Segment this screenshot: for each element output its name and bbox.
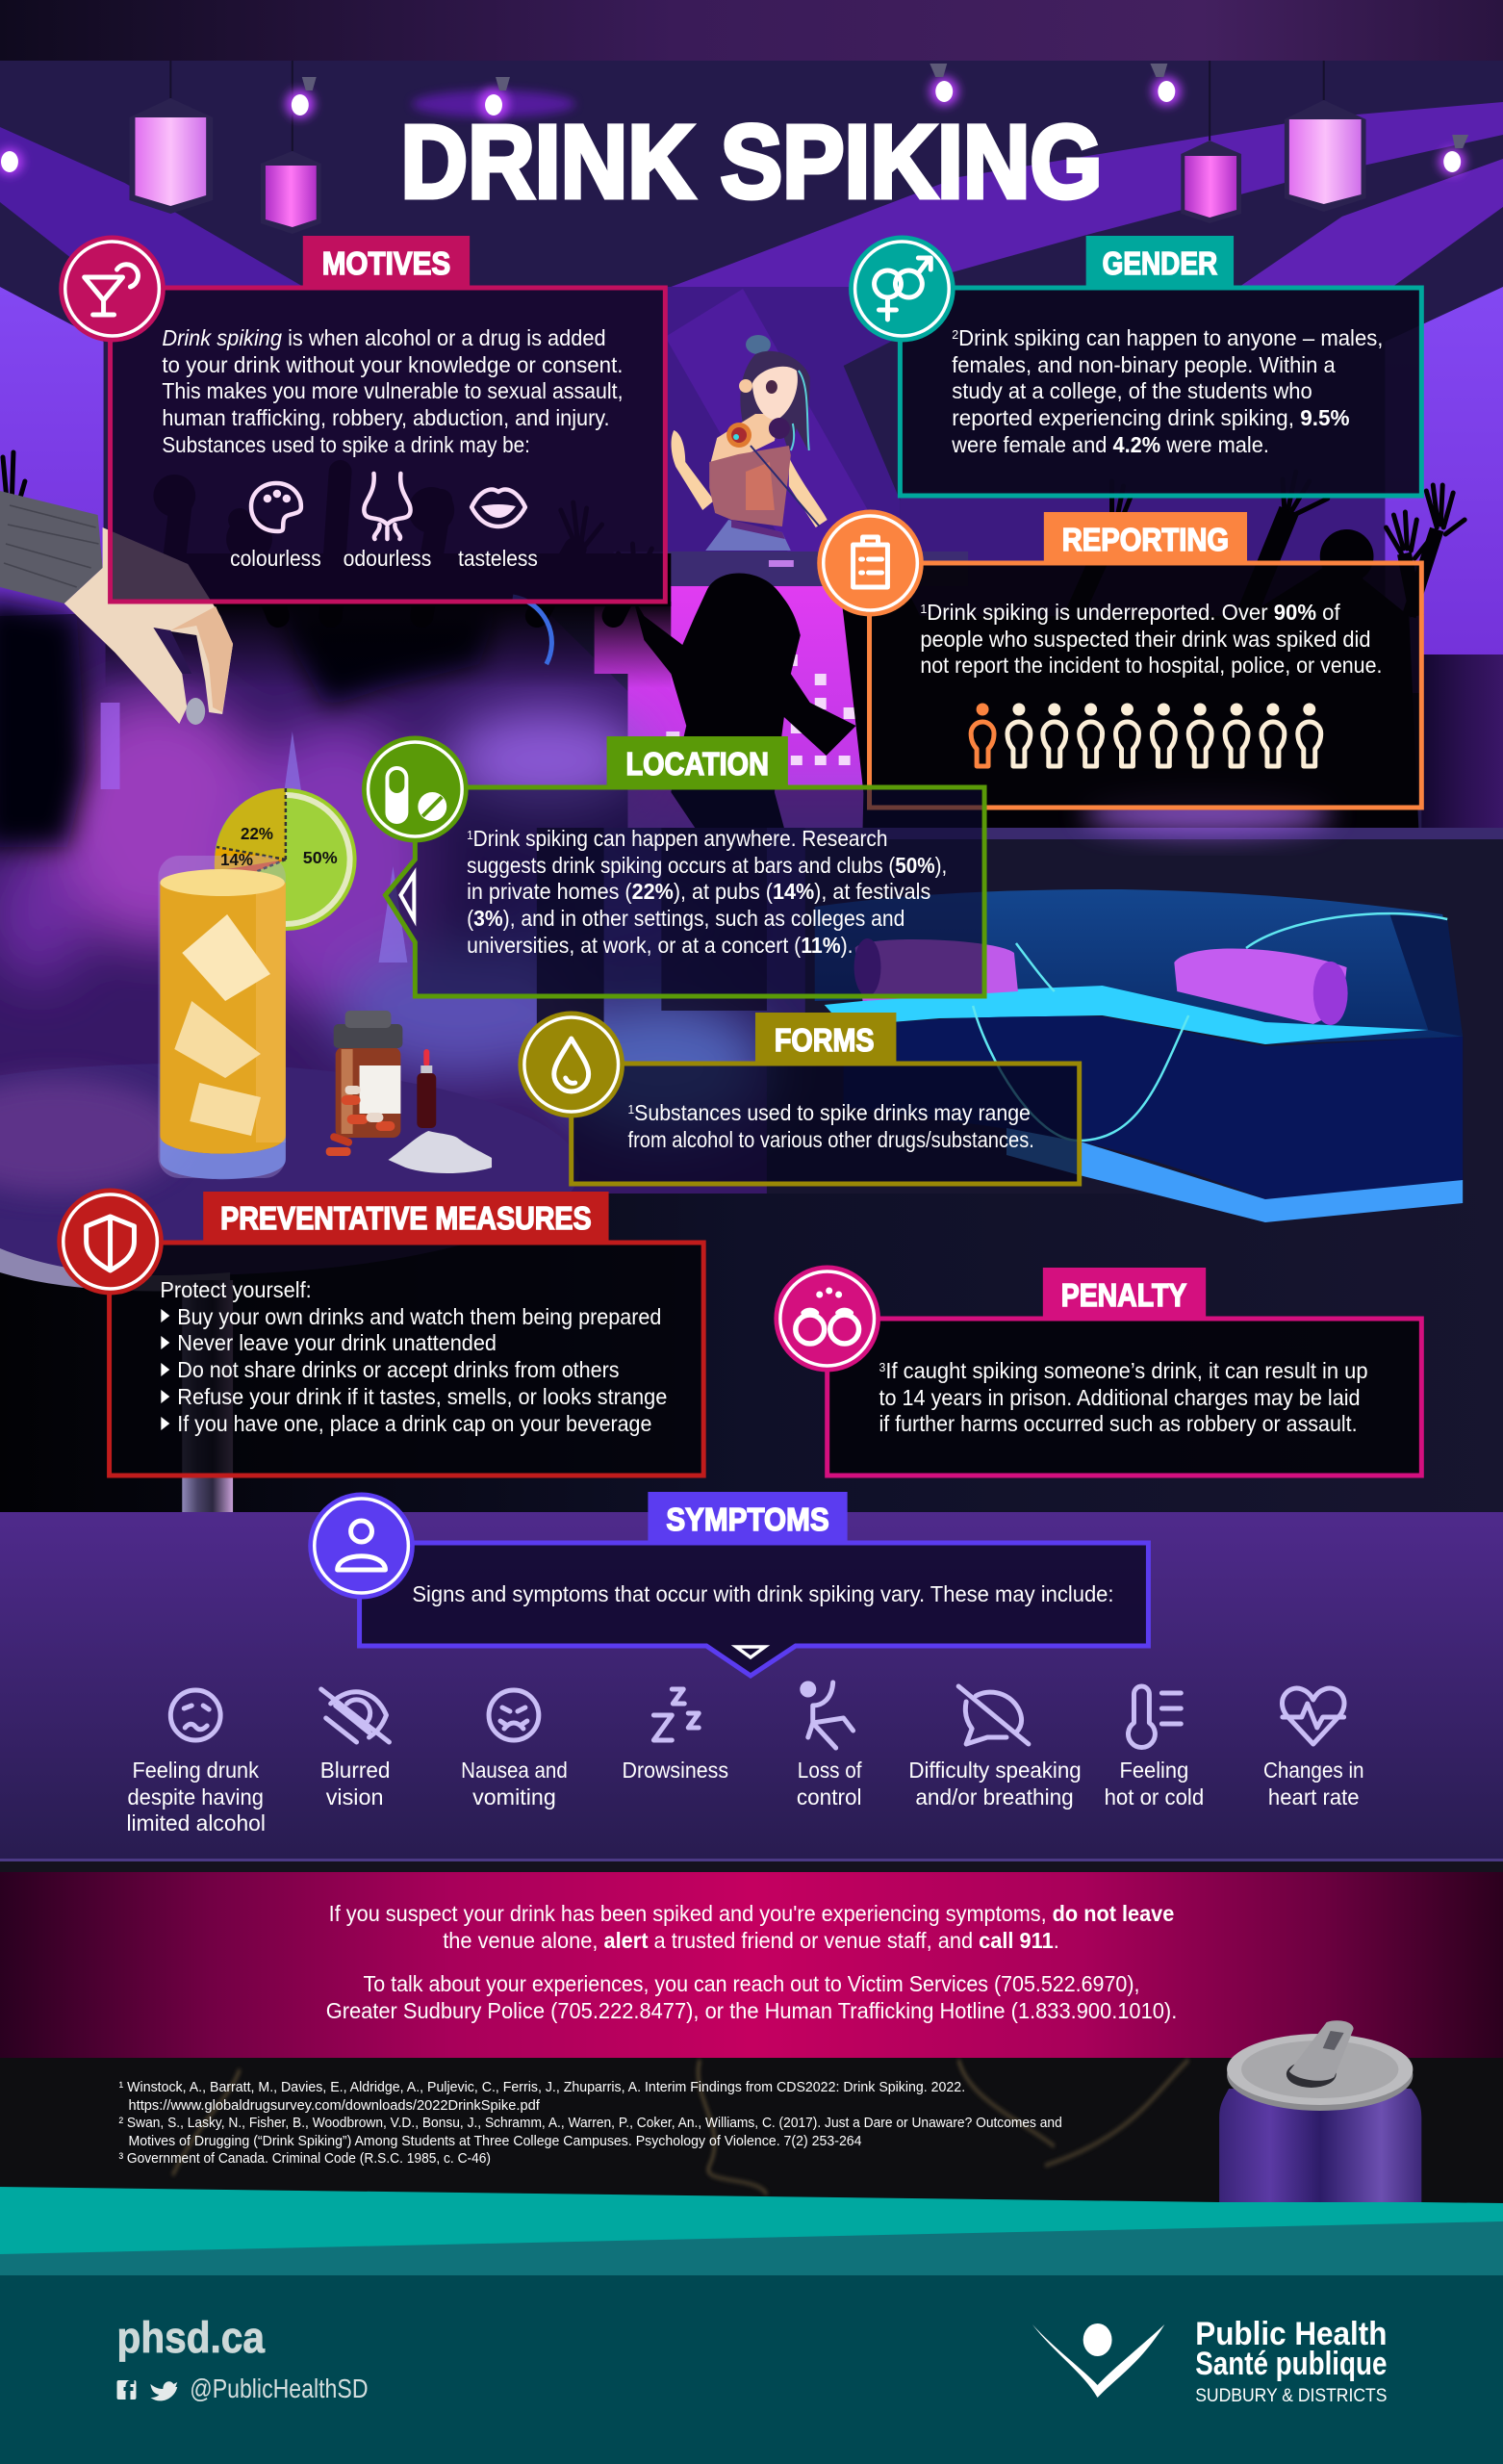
illustration: drink can bbox=[1219, 2020, 1421, 2214]
icon: person bbox=[308, 1492, 415, 1600]
symptom: drowsiness: Drowsiness bbox=[623, 1758, 728, 1783]
text: gender description: females, and non-binary people. Within a bbox=[952, 352, 1336, 377]
footer: social media: @PublicHealthSD bbox=[190, 2374, 369, 2403]
text: references bbox=[119, 2079, 1062, 2167]
symptom: changes in heart rate bbox=[1263, 1688, 1364, 1810]
band: references on black marble bbox=[0, 2058, 1503, 2212]
text: reporting description: not report the incident to hospital, police, or venue. bbox=[920, 653, 1382, 678]
text: protective tips list bbox=[160, 1277, 667, 1436]
footer: organization logo: Public Health bbox=[1195, 2316, 1387, 2352]
text: motives description: Substances used to spike a drink may be: bbox=[162, 432, 530, 457]
symptom: drowsiness bbox=[623, 1689, 728, 1783]
heading: location: LOCATION bbox=[625, 746, 769, 782]
panel: gender bbox=[849, 235, 1421, 496]
text: motives description: This makes you more vulnerable to sexual assault, bbox=[162, 378, 624, 403]
symptom: loss of control: control bbox=[797, 1784, 862, 1810]
drink spiking title: DRINK SPIKING bbox=[400, 103, 1103, 219]
band: alert message: the venue alone, alert a trusted friend or venue staff, and call 911. bbox=[443, 1928, 1059, 1953]
text: motives description: Drink spiking is when alcohol or a drug is added bbox=[162, 325, 606, 350]
section: symptoms background bbox=[0, 1512, 1503, 1860]
text: forms description: from alcohol to various other drugs/substances. bbox=[627, 1127, 1034, 1152]
symptom: blurred vision: Blurred bbox=[320, 1758, 390, 1783]
icon: gender symbols bbox=[849, 235, 955, 343]
footer: organization logo: SUDBURY & DISTRICTS bbox=[1195, 2386, 1387, 2406]
text: gender description: were female and 4.2% were male. bbox=[951, 432, 1269, 457]
nightclub background scene bbox=[0, 0, 1503, 1512]
text: gender description: study at a college, of the students who bbox=[952, 378, 1312, 403]
symptom: nausea and vomiting: vomiting bbox=[472, 1784, 556, 1810]
symptom: nausea and vomiting bbox=[461, 1690, 568, 1810]
illustration: drink glass with lime pie chart: 22% bbox=[241, 824, 273, 843]
symptom: blurred vision bbox=[320, 1689, 390, 1810]
footer bands bbox=[0, 2187, 1503, 2464]
heading: forms: FORMS bbox=[775, 1022, 875, 1058]
text: location description: in private homes (22%), at pubs (14%), at festivals bbox=[467, 879, 930, 904]
text: gender description: 2 bbox=[952, 327, 958, 342]
crowd silhouettes bbox=[3, 452, 1503, 1040]
symptom: feeling hot or cold bbox=[1105, 1686, 1204, 1810]
panel: penalty bbox=[774, 1265, 1421, 1476]
icon: nose bbox=[364, 474, 411, 539]
symptom: changes in heart rate: heart rate bbox=[1268, 1784, 1360, 1810]
text: symptoms intro: Signs and symptoms that occur with drink spiking vary. These may include: bbox=[412, 1581, 1114, 1606]
text: reporting description: people who suspected their drink was spiked did bbox=[920, 627, 1371, 652]
footer: social media bbox=[117, 2374, 369, 2403]
symptom: loss of control bbox=[797, 1682, 862, 1810]
text: location description: suggests drink spiking occurs at bars and clubs (50%), bbox=[467, 853, 947, 878]
text: forms description: 1 bbox=[627, 1102, 634, 1116]
text: protective tips list: Buy your own drinks and watch them being prepared bbox=[177, 1304, 661, 1329]
text: penalty description: if further harms occurred such as robbery or assault. bbox=[879, 1411, 1358, 1436]
symptom: changes in heart rate: Changes in bbox=[1263, 1758, 1364, 1783]
text: protective tips list: Refuse your drink if it tastes, smells, or looks strange bbox=[177, 1384, 667, 1409]
dropper bottle bbox=[417, 1049, 436, 1128]
illustration: hand dropping pill bbox=[0, 491, 233, 725]
icon: lips bbox=[471, 490, 525, 526]
symptom: nausea and vomiting: Nausea and bbox=[461, 1758, 568, 1783]
symptom: difficulty speaking and breathing: Difficulty speaking bbox=[908, 1758, 1082, 1783]
panel: motives bbox=[59, 235, 665, 602]
text: forms description: Substances used to spike drinks may range bbox=[634, 1100, 1031, 1125]
symptom: feeling drunk bbox=[126, 1690, 266, 1835]
text: motives description bbox=[162, 325, 624, 457]
icon: liquid drop bbox=[518, 1011, 624, 1118]
panel: preventative measures bbox=[57, 1188, 703, 1476]
heading: penalty: PENALTY bbox=[1061, 1277, 1186, 1313]
chart: 1 in 10 people icons bbox=[971, 703, 1321, 766]
symptom: loss of control: Loss of bbox=[798, 1758, 862, 1783]
symptom: difficulty speaking and breathing bbox=[908, 1686, 1082, 1810]
band: alert message: To talk about your experiences, you can reach out to Victim Services (705.522.6970), bbox=[364, 1971, 1139, 1996]
icon: clipboard bbox=[817, 510, 924, 616]
panel: location bbox=[362, 735, 984, 996]
text: penalty description: to 14 years in prison. Additional charges may be laid bbox=[879, 1385, 1361, 1410]
icon: palette bbox=[251, 483, 301, 531]
text: protective tips list: Never leave your drink unattended bbox=[177, 1330, 497, 1355]
text: motives description: to your drink without your knowledge or consent. bbox=[162, 352, 624, 377]
icon: cocktail glass bbox=[59, 235, 166, 343]
illustration: DJ girl bbox=[672, 335, 828, 551]
text: reporting description: 1 bbox=[920, 602, 927, 616]
illustration: drink glass with lime pie chart bbox=[158, 788, 357, 1179]
panel: symptoms bbox=[308, 1492, 1148, 1676]
text: references: ¹ Winstock, A., Barratt, M., Davies, E., Aldridge, A., Puljevic, C., Ferris, J., Zhuparris, A. Interim Findings from CDS2022: Drink Spiking. 2022. bbox=[119, 2079, 965, 2095]
text: forms description bbox=[627, 1100, 1034, 1152]
text: location description: universities, at work, or at a concert (11%). bbox=[467, 933, 853, 958]
powder pile bbox=[388, 1131, 492, 1173]
pill bottle bbox=[334, 1011, 402, 1138]
text: location description: 1 bbox=[467, 828, 473, 842]
illustration: drink glass with lime pie chart: 50% bbox=[303, 848, 338, 867]
text: reporting description bbox=[920, 600, 1382, 678]
heading: symptoms: SYMPTOMS bbox=[666, 1502, 829, 1537]
text: gender description: reported experiencing drink spiking, 9.5% bbox=[952, 405, 1350, 430]
band: alert message bbox=[0, 1859, 1503, 2058]
text: location description: (3%), and in other settings, such as colleges and bbox=[467, 906, 904, 931]
table pole bbox=[182, 1280, 233, 1512]
heading: preventative measures: PREVENTATIVE MEASURES bbox=[220, 1200, 592, 1236]
text: references: ³ Government of Canada. Criminal Code (R.S.C. 1985, c. C-46) bbox=[119, 2150, 491, 2167]
labels: substance properties: tasteless bbox=[458, 546, 538, 571]
illustration: table with pills and powder bbox=[0, 1011, 580, 1291]
text: references: Motives of Drugging (“Drink Spiking”) Among Students at Three College Campuses. Psychology of Violence. 7(2) 253-264 bbox=[128, 2133, 862, 2149]
text: references: ² Swan, S., Lasky, N., Fisher, B., Woodbrown, V.D., Bonsu, J., Schramm, A., Warren, P., Coker, An., Williams, C. (2017). Just a Dare or Unaware? Outcomes and bbox=[119, 2115, 1062, 2131]
symptom: feeling hot or cold: hot or cold bbox=[1105, 1784, 1204, 1810]
icon: handcuffs bbox=[774, 1265, 880, 1373]
text: reporting description: Drink spiking is underreported. Over bbox=[927, 600, 1274, 625]
text: protective tips list: Protect yourself: bbox=[160, 1277, 312, 1302]
symptom: feeling drunk: limited alcohol bbox=[126, 1810, 266, 1835]
text: location description bbox=[467, 826, 947, 958]
heading: gender: GENDER bbox=[1103, 245, 1217, 281]
text: protective tips list: Do not share drinks or accept drinks from others bbox=[177, 1357, 620, 1382]
illustration: blue sofa bbox=[815, 889, 1463, 1222]
symptom: feeling drunk: Feeling drunk bbox=[132, 1758, 259, 1783]
symptom: feeling drunk: despite having bbox=[127, 1784, 264, 1810]
symptom: feeling hot or cold: Feeling bbox=[1120, 1758, 1188, 1783]
labels: substance properties: odourless bbox=[344, 546, 431, 571]
text: penalty description bbox=[879, 1358, 1368, 1436]
text: penalty description: If caught spiking someone’s drink, it can result in up bbox=[885, 1358, 1368, 1383]
panel: reporting bbox=[817, 510, 1421, 808]
text: reporting description: 90% of bbox=[1274, 600, 1340, 625]
panel: forms bbox=[518, 1011, 1080, 1184]
band: alert message: If you suspect your drink has been spiked and you're experiencing symptoms, do not leave bbox=[329, 1901, 1174, 1926]
icon: shield bbox=[57, 1188, 164, 1296]
hanging lamps and bulbs bbox=[0, 61, 1468, 234]
text: references: https://www.globaldrugsurvey.com/downloads/2022DrinkSpike.pdf bbox=[128, 2097, 541, 2114]
text: gender description: Drink spiking can happen to anyone – males, bbox=[958, 325, 1383, 350]
text: protective tips list: If you have one, place a drink cap on your beverage bbox=[177, 1411, 651, 1436]
footer: organization logo bbox=[1032, 2316, 1387, 2406]
text: motives description: human trafficking, robbery, abduction, and injury. bbox=[162, 405, 610, 430]
text: penalty description: 3 bbox=[879, 1360, 885, 1374]
heading: motives: MOTIVES bbox=[322, 245, 450, 281]
illustration: drink glass with lime pie chart: 14% bbox=[220, 850, 253, 869]
labels: substance properties bbox=[230, 546, 538, 571]
labels: substance properties: colourless bbox=[230, 546, 321, 571]
footer: organization logo: Santé publique bbox=[1195, 2346, 1387, 2382]
text: location description: Drink spiking can happen anywhere. Research bbox=[473, 826, 887, 851]
band: alert message: Greater Sudbury Police (705.222.8477), or the Human Trafficking Hotline (1.833.900.1010). bbox=[326, 1998, 1177, 2023]
footer: website: phsd.ca bbox=[117, 2313, 266, 2362]
icon: pill and no symbol bbox=[362, 735, 469, 843]
symptom: difficulty speaking and breathing: and/or breathing bbox=[915, 1784, 1074, 1810]
heading: reporting: REPORTING bbox=[1062, 522, 1229, 557]
symptom: blurred vision: vision bbox=[326, 1784, 383, 1810]
text: gender description bbox=[951, 325, 1383, 457]
